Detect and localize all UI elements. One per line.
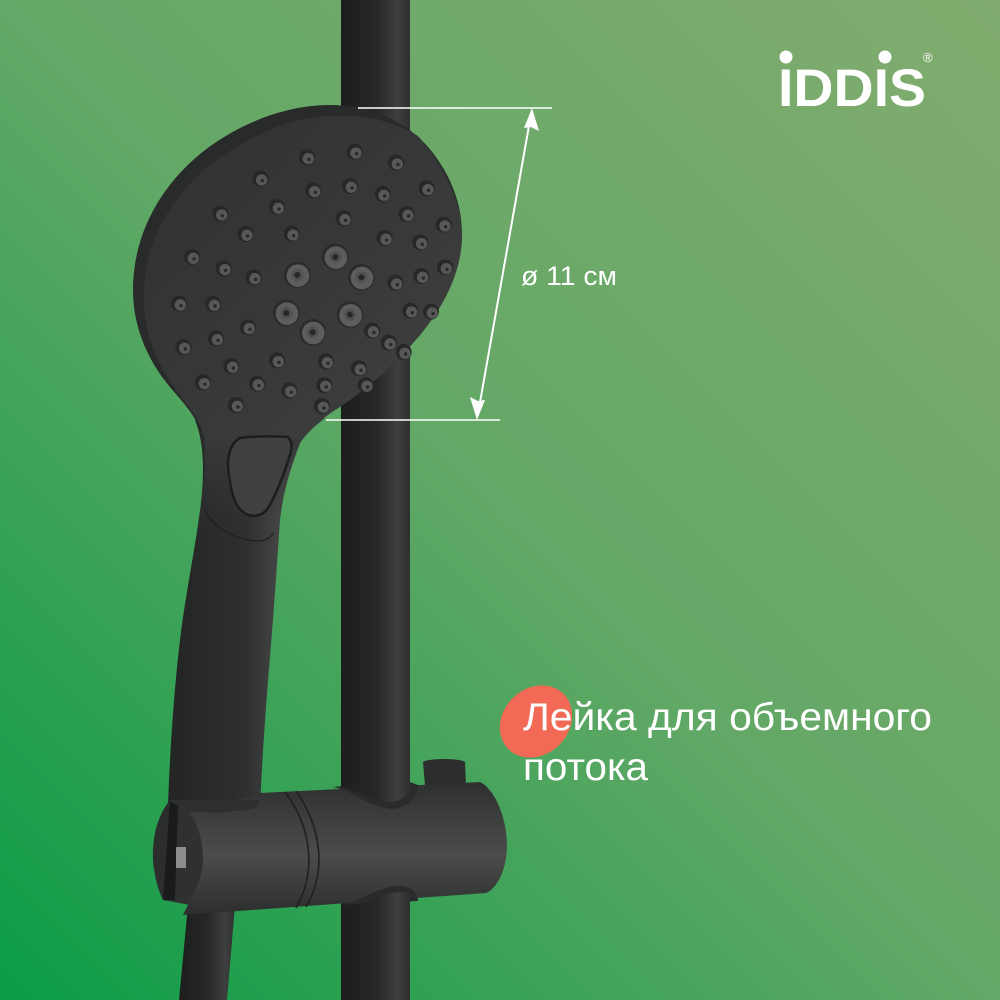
red accent blob <box>485 671 587 772</box>
bottom extension line <box>326 419 500 421</box>
clamp body <box>183 782 507 915</box>
vertical shower rod <box>341 0 410 1000</box>
dimension callout <box>326 108 617 420</box>
clamp slot <box>163 800 206 908</box>
rod top overlap <box>341 740 410 802</box>
rod collar bottom <box>336 886 418 905</box>
caption: Лейка для объемного <box>523 696 932 739</box>
handle base over clamp <box>168 800 260 813</box>
dimension label: ø 11 см <box>521 261 617 291</box>
clamp seam <box>285 791 319 908</box>
handle seam <box>205 510 274 541</box>
logo i dots <box>780 50 892 64</box>
clamp slot shadow <box>163 800 178 900</box>
top extension line <box>358 107 552 109</box>
registered mark: ® <box>923 50 933 65</box>
spray nozzles <box>171 144 453 414</box>
flexible hose <box>179 905 235 1000</box>
double arrow <box>470 108 539 420</box>
head spray face <box>144 116 462 445</box>
shower head <box>133 105 462 445</box>
rod collar top <box>333 782 418 809</box>
shower handle <box>168 418 325 808</box>
handle neck blending into head <box>193 436 301 550</box>
sliding rod clamp <box>153 740 507 940</box>
clamp knob <box>423 759 466 790</box>
clamp label plate <box>176 847 186 868</box>
head back rim <box>133 105 462 445</box>
clamp back lens <box>153 800 190 903</box>
logo: IDDIS <box>778 59 926 118</box>
rod bottom overlap <box>341 892 410 940</box>
caption: потока <box>523 746 648 789</box>
icon: mode button <box>228 436 292 516</box>
